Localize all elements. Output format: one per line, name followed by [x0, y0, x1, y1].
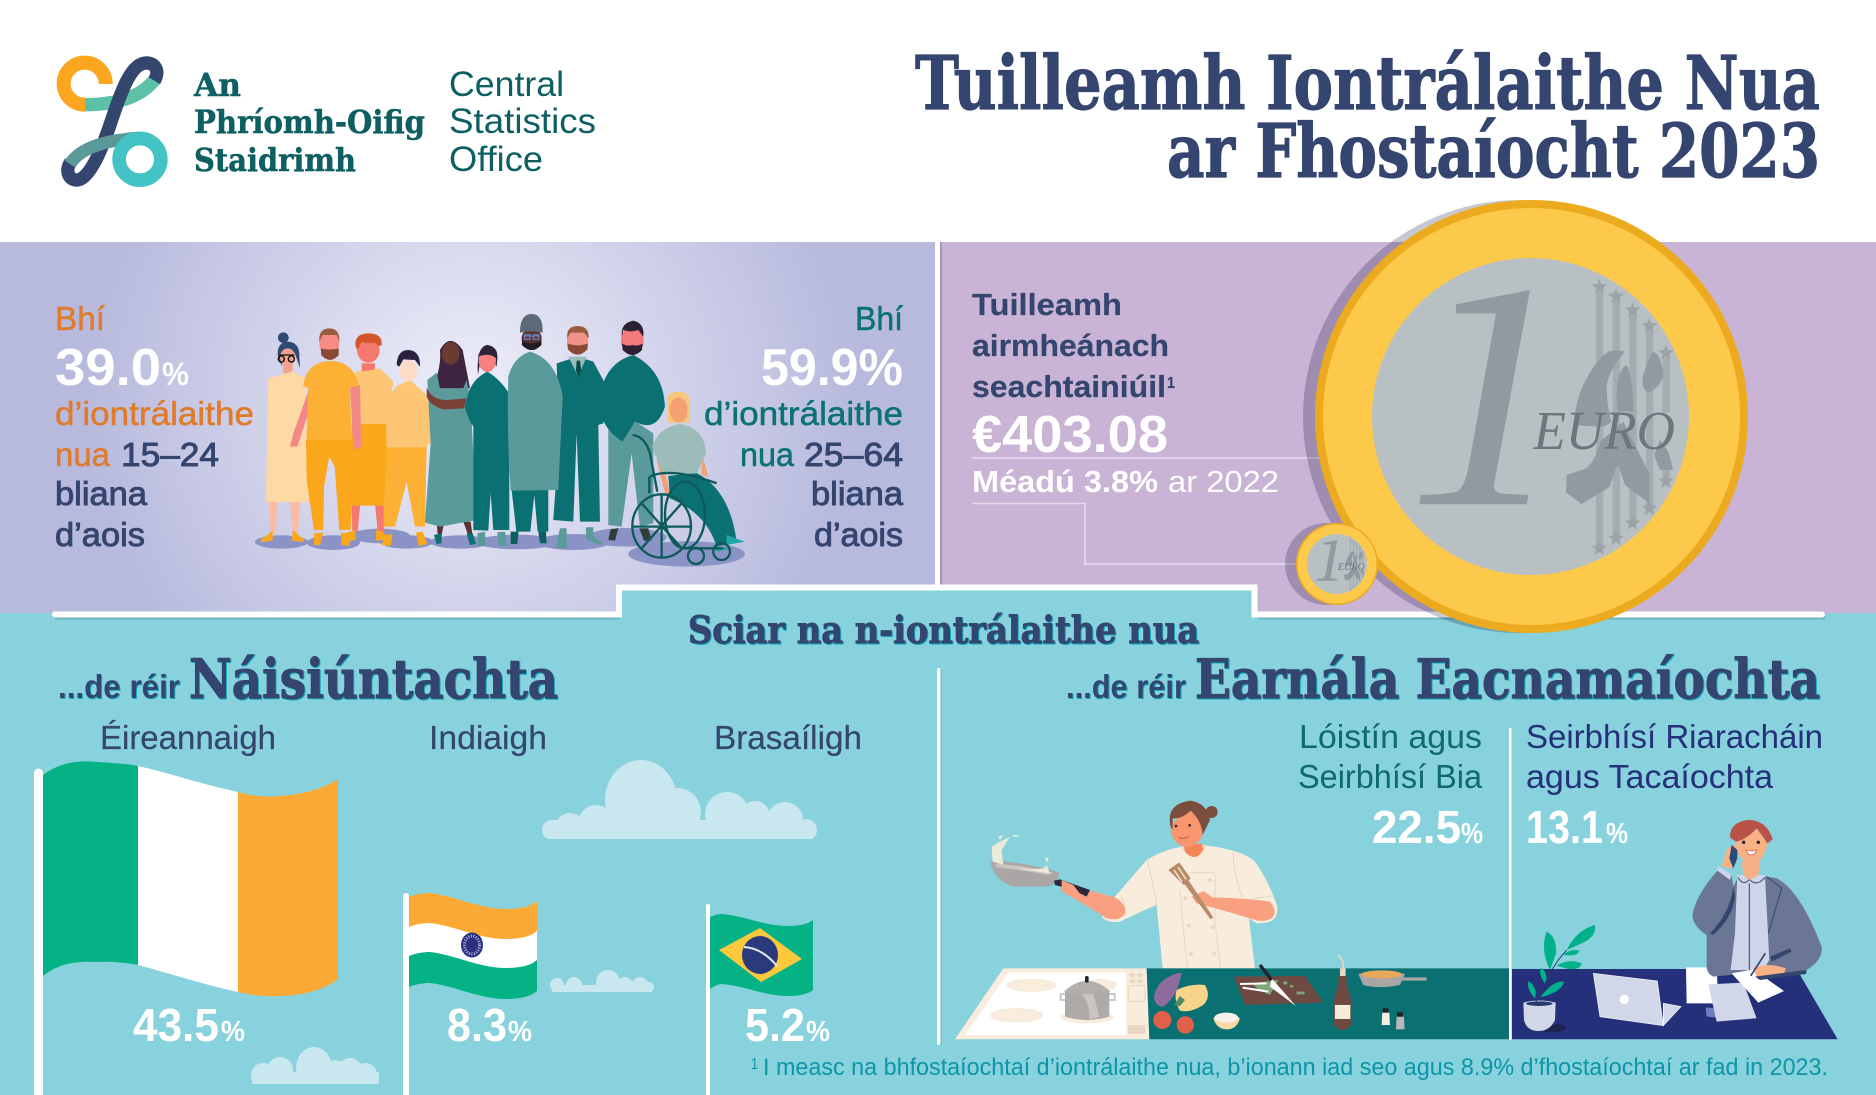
text: earnings heading: Tuilleamh	[972, 287, 1122, 322]
text: 15-24 age share: 15–24	[121, 436, 219, 473]
label: accommodation and food: Seirbhísí Bia	[1298, 758, 1483, 795]
person 3	[347, 333, 393, 541]
text: 25-64 age share: Bhí	[855, 300, 903, 337]
cloud: large	[542, 760, 817, 843]
label: Brazilian: Brasaíligh	[714, 719, 862, 756]
text: yearly increase: Méadú 3.8%	[972, 464, 1158, 499]
footnote: 1	[751, 1056, 758, 1073]
value: Irish share: 43.5	[133, 999, 219, 1051]
text: yearly increase	[972, 464, 1279, 499]
text: 15-24 age share: d’iontrálaithe	[55, 395, 254, 432]
text: 15-24 age share	[55, 300, 254, 553]
footnote: I measc na bhfostaíochtaí d’iontrálaithe nua, b’ionann iad seo agus 8.9% d’fhostaíochtaí ar fad in 2023.	[763, 1054, 1828, 1081]
text: 25-64 age share: 25–64	[804, 436, 903, 473]
text: 15-24 age share: d’aois	[55, 516, 145, 553]
value: accommodation and food: %	[1461, 818, 1483, 850]
title	[915, 41, 1820, 195]
logo text: Irish name	[193, 66, 425, 179]
icon: small one euro coin	[1285, 523, 1378, 605]
person 2	[290, 328, 361, 546]
cloud: small middle	[550, 970, 654, 994]
heading: by economic sector: ...de réir	[1066, 668, 1186, 705]
header: logo	[64, 63, 596, 180]
text: 15-24 age share: Bhí	[55, 300, 105, 337]
heading: share of new entrants: Sciar na n-iontrálaithe nua	[688, 608, 1199, 652]
logo text: Irish name: Staidrimh	[194, 141, 356, 179]
text: 15-24 age share: 39.0	[55, 339, 161, 397]
text: 25-64 age share: d’iontrálaithe	[704, 395, 903, 432]
label: administrative and support: Seirbhísí Riaracháin	[1526, 718, 1823, 755]
icon: large one euro coin: EURO	[1532, 400, 1675, 461]
logo text: English name	[449, 65, 596, 179]
label: administrative and support	[1526, 718, 1823, 795]
value: administrative and support: 13.1	[1526, 801, 1603, 853]
person 4	[378, 350, 436, 546]
person 8	[553, 326, 605, 548]
value: Indian share: %	[508, 1016, 532, 1048]
icon: CSO logo mark	[64, 63, 161, 180]
panel: age groups	[0, 242, 935, 614]
icon: Brazilian flag	[706, 904, 813, 1095]
value: Brazilian share: 5.2	[745, 999, 805, 1051]
text: earnings heading: seachtainiúil	[972, 369, 1166, 404]
value: Brazilian share: %	[806, 1016, 830, 1048]
panel: by economic sector	[955, 647, 1838, 1040]
text: 25-64 age share: nua	[740, 436, 795, 473]
text: yearly increase: ar 2022	[1168, 464, 1279, 499]
illustration: office worker at desk	[1512, 820, 1838, 1039]
icon: Indian flag	[403, 893, 537, 1095]
label: administrative and support: agus Tacaíochta	[1526, 758, 1774, 795]
text: 15-24 age share: %	[162, 356, 189, 392]
logo text: Irish name: Phríomh-Oifig	[194, 103, 425, 141]
panel: average weekly earnings	[940, 242, 1876, 614]
icon: large one euro coin	[1303, 200, 1748, 633]
label: accommodation and food	[1298, 718, 1483, 795]
logo text: Irish name: An	[193, 66, 241, 104]
person 9	[598, 321, 665, 541]
logo text: English name: Statistics	[449, 102, 596, 141]
label: Indian: Indiaigh	[429, 719, 547, 756]
person 7	[508, 314, 563, 544]
connector lines	[972, 458, 1325, 564]
heading: by nationality: ...de réir	[58, 668, 180, 705]
illustration: chef and kitchen counter	[955, 801, 1510, 1039]
heading: by nationality	[58, 647, 558, 711]
icon: Irish flag	[34, 761, 338, 1095]
text: earnings heading	[972, 287, 1175, 404]
logo text: English name: Office	[449, 140, 543, 179]
text: 15-24 age share: bliana	[55, 475, 148, 512]
sector divider	[1509, 728, 1512, 1040]
text: 25-64 age share: bliana	[811, 475, 904, 512]
text: earnings heading: 1	[1167, 375, 1175, 392]
label: Irish: Éireannaigh	[100, 719, 276, 756]
value: accommodation and food: 22.5	[1372, 801, 1461, 853]
heading: by nationality: Náisiúntachta	[189, 647, 558, 711]
person 5	[425, 341, 477, 545]
label: accommodation and food: Lóistín agus	[1299, 718, 1482, 755]
person in wheelchair	[632, 392, 745, 564]
text: 25-64 age share	[704, 300, 904, 553]
illustration: group of people	[255, 314, 745, 567]
text: 25-64 age share: 59.9%	[761, 339, 903, 397]
logo text: English name: Central	[449, 65, 564, 104]
icon: small one euro coin: EURO	[1337, 562, 1365, 573]
person 1	[260, 332, 309, 542]
panel: share of new entrants background	[0, 588, 1876, 1095]
text: 15-24 age share: nua	[55, 436, 111, 473]
person 6	[465, 345, 515, 546]
cloud: small bottom	[251, 1047, 379, 1084]
divider	[937, 668, 942, 1045]
value: Irish share: %	[221, 1016, 245, 1048]
text: earnings value: €403.08	[972, 406, 1168, 464]
value: Indian share: 8.3	[447, 999, 507, 1051]
text: 25-64 age share: d’aois	[814, 516, 903, 553]
text: earnings heading: airmheánach	[972, 328, 1169, 363]
panel: by nationality	[34, 647, 862, 1095]
value: administrative and support: %	[1606, 818, 1628, 850]
